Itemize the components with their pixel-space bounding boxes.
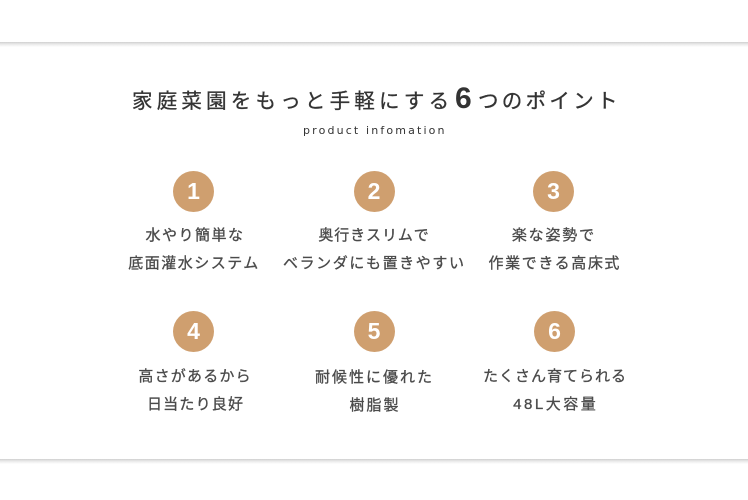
point 1: 1 <box>187 178 200 204</box>
point 3: 作業できる高床式 <box>489 255 621 272</box>
point 6: たくさん育てられる <box>483 368 627 385</box>
point 4 <box>138 311 252 413</box>
point 2: 2 <box>368 178 380 204</box>
point 1 <box>128 171 260 272</box>
point 3: 楽な姿勢で <box>512 227 596 244</box>
title: 家庭菜園をもっと手軽にする <box>132 90 453 113</box>
point 5 <box>315 311 434 414</box>
point 6: 48L大容量 <box>513 396 598 413</box>
point 2: ベランダにも置きやすい <box>283 255 466 272</box>
subtitle: product infomation <box>303 124 447 137</box>
point 4: 高さがあるから <box>138 368 252 385</box>
bottom divider shadow <box>0 459 748 464</box>
point 2 <box>283 171 466 272</box>
point 4: 日当たり良好 <box>147 396 244 413</box>
point 4: 4 <box>187 318 200 344</box>
title: 6 <box>455 82 472 115</box>
point 6 <box>483 311 627 413</box>
point 5: 樹脂製 <box>349 397 400 414</box>
top divider shadow <box>0 42 748 47</box>
point 2: 奥行きスリムで <box>318 227 430 244</box>
point 6: 6 <box>548 318 561 344</box>
point 1: 底面灌水システム <box>128 255 260 272</box>
point 3: 3 <box>547 178 560 204</box>
point 1: 水やり簡単な <box>145 227 244 244</box>
point 5: 耐候性に優れた <box>315 369 434 386</box>
point 5: 5 <box>368 318 380 344</box>
title: つのポイント <box>478 90 621 113</box>
title <box>132 82 621 115</box>
point 3 <box>488 171 621 272</box>
